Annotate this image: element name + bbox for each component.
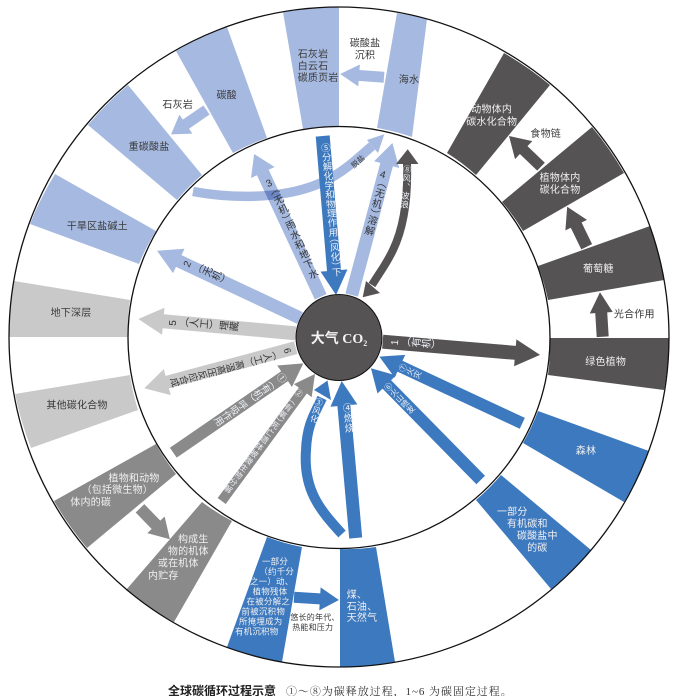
label: carbonate sediment: 碳酸盐 [350, 36, 380, 50]
sector: carbonic acid [176, 27, 267, 153]
label: coal oil gas: 石油、 [347, 600, 377, 613]
label: coal oil gas: 煤、 [347, 588, 367, 601]
arrow circled 7: fire [374, 345, 528, 435]
arrow 5 blue label: ⑤分解化学和物理作 用 （风化 ） 下 [319, 142, 342, 278]
label: limestone dolomite shale [298, 48, 339, 84]
arrow 8 label: ⑧风、波浪 [399, 165, 412, 210]
arrow: limestone [165, 101, 213, 144]
arrow circled 3 label: ③风化 [308, 397, 324, 425]
label: other carbon compounds: 其他碳化合物 [46, 398, 108, 412]
centre circle: atmospheric CO2: 大气 CO [311, 332, 363, 347]
sector: green plants [548, 338, 669, 390]
arrow 6: artificial high temperature synthesis [141, 335, 299, 401]
label: photosynthesis: 光合作用 [614, 308, 655, 320]
label: limestone dolomite shale: 石灰岩 [298, 48, 328, 60]
arrow: carbonate sediment [339, 63, 385, 88]
arrow circled 1 label: ①（有机）呼吸作用 [211, 369, 289, 428]
arrow circled 1: respiration [166, 353, 311, 463]
arrow 3 label: 3（无机）雨水和地下水 [262, 176, 320, 282]
label: carbonate sediment [350, 36, 380, 62]
centre circle: atmospheric CO2 [296, 294, 382, 380]
label: buried organic sediment: 在被分解之 [247, 597, 290, 607]
label: carbon in organisms [70, 472, 160, 508]
label: organic and carbonate carbon: 有机碳和 [507, 517, 548, 530]
label: arid saline soil: 干旱区盐碱土 [67, 220, 128, 232]
sector: organic and carbonate carbon [476, 475, 591, 589]
sector: limestone dolomite shale [283, 7, 339, 129]
label: organic and carbonate carbon: 碳酸盐中 [517, 529, 558, 542]
sector: bicarbonate [88, 85, 202, 200]
arrow 1: organic [382, 328, 541, 368]
arrow 2 label: 2（无机） [181, 256, 232, 289]
label: organic and carbonate carbon: 一部分 [497, 505, 528, 518]
arrow circled 4: combustion [328, 380, 369, 539]
label: carbon in organisms: 体内的碳 [70, 496, 111, 508]
sector: deep underground [9, 281, 130, 337]
arrow 2: inorganic [151, 239, 306, 330]
arrow: organisms to storage [131, 500, 179, 548]
arrow: glucose to plant compounds [556, 201, 597, 252]
label: buried organic sediment: 之一）动、 [250, 577, 293, 587]
arrow 4 label: 4（无机）溶解 [361, 169, 390, 237]
arrow 1 label: 1（有机） [390, 336, 441, 352]
curved arrow label: 脱盐 [349, 152, 367, 170]
sector: seawater [377, 13, 427, 137]
sector: coal oil gas [340, 547, 395, 667]
label: buried organic sediment: 植物残体 [253, 587, 288, 597]
sector: arid saline soil [30, 174, 156, 264]
group: light blue sectors [30, 7, 427, 264]
sector: stored in bodies [126, 502, 232, 622]
label: green plants: 绿色植物 [585, 355, 626, 368]
label: carbon in organisms: （包括微生物） [82, 483, 153, 496]
label: bicarbonate: 重碳酸盐 [129, 140, 169, 153]
arrow: food chain [500, 127, 550, 176]
sector: forest [523, 411, 649, 502]
label: stored in bodies [148, 532, 209, 582]
label: long time, heat and pressure: 热能和压力 [292, 622, 333, 632]
label: long time, heat and pressure: 悠长的年代、 [290, 612, 340, 622]
arrow 4: inorganic dissolution [339, 140, 405, 298]
label: limestone dolomite shale: 碳质页岩 [298, 71, 339, 84]
group: mid grey sectors [54, 444, 232, 622]
arrow 5 grey: artificial burial [137, 306, 297, 347]
group: blue sectors [227, 411, 649, 667]
arrow 3: inorganic rain and groundwater [242, 148, 332, 302]
label: stored in bodies: 或在机体 [158, 556, 199, 570]
sector: glucose [538, 226, 664, 300]
caption [168, 683, 513, 696]
label: buried organic sediment: 前被沉积物 [242, 607, 285, 617]
label: carbonate sediment: 沉积 [355, 48, 375, 62]
label: buried organic sediment [235, 557, 294, 637]
label: organic and carbonate carbon: 的碳 [527, 541, 548, 554]
label: seawater: 海水 [399, 73, 419, 86]
group: light grey sectors [9, 281, 138, 448]
centre circle: atmospheric CO2: 2 [363, 339, 367, 348]
label: stored in bodies: 物的机体 [168, 544, 209, 558]
arrow 6 label: 6（人工）高温高压反应合成 [168, 344, 294, 388]
sector: plant carbon compounds [502, 127, 624, 231]
sector: carbon in organisms [54, 444, 176, 548]
arrow 5 blue: weathering [309, 135, 350, 296]
label: buried organic sediment: （约千分 [259, 567, 294, 577]
arrow circled 3: weathering curved [306, 380, 342, 534]
label: animal carbohydrates: 碳水化合物 [466, 115, 517, 128]
arrow circled 2: decomposition [213, 367, 324, 508]
label: plant carbon compounds: 植物体内 [540, 171, 580, 184]
label: buried organic sediment: 所掩埋成为 [239, 617, 282, 627]
label: food chain: 食物链 [530, 127, 561, 140]
arrow: photosynthesis [589, 292, 614, 337]
label: carbonic acid: 碳酸 [216, 88, 237, 102]
label: coal oil gas [347, 588, 377, 624]
label: limestone: 石灰岩 [162, 98, 193, 111]
sector: other carbon compounds [15, 375, 138, 448]
inner ring circle [128, 126, 550, 548]
arrow 5 grey label: 5（人工）埋藏 [168, 316, 240, 334]
group: dark grey sectors [447, 53, 669, 390]
arrow circled 6 label: ⑥火山喷发 [382, 381, 417, 416]
label: forest: 森林 [576, 444, 596, 457]
arrow: burial to fossil fuels [293, 586, 340, 611]
arrow circled 4 label: ④燃烧 [340, 402, 355, 434]
arrow 8: wind and waves double headed [363, 149, 418, 297]
arrow circled 7 label: ⑦火灾 [397, 362, 424, 381]
label: deep underground: 地下深层 [51, 306, 91, 319]
label: limestone dolomite shale: 白云石 [298, 60, 328, 72]
label: stored in bodies: 构成生 [178, 532, 209, 546]
label: coal oil gas: 天然气 [347, 611, 377, 624]
arrow: sea salt curved [193, 134, 384, 196]
label: animal carbohydrates [466, 102, 517, 128]
sector: animal carbohydrates [447, 53, 550, 175]
label: plant carbon compounds: 碳化合物 [540, 183, 580, 196]
label: organic and carbonate carbon [497, 505, 558, 554]
arrow circled 2 label: ②（有氧）死亡遗体被微生物分解 [222, 387, 305, 496]
label: buried organic sediment: 一部分 [262, 557, 288, 567]
sector: buried organic sediment [227, 537, 302, 662]
arrow circled 6: volcanic eruption [362, 359, 490, 489]
label: stored in bodies: 内贮存 [148, 569, 179, 582]
label: glucose: 葡萄糖 [583, 262, 614, 275]
label: buried organic sediment: 有机沉积物 [235, 627, 279, 637]
label: long time, heat and pressure [290, 612, 340, 632]
label: carbon in organisms: 植物和动物 [108, 472, 160, 484]
label: animal carbohydrates: 动物体内 [471, 102, 512, 116]
label: plant carbon compounds [540, 171, 580, 196]
